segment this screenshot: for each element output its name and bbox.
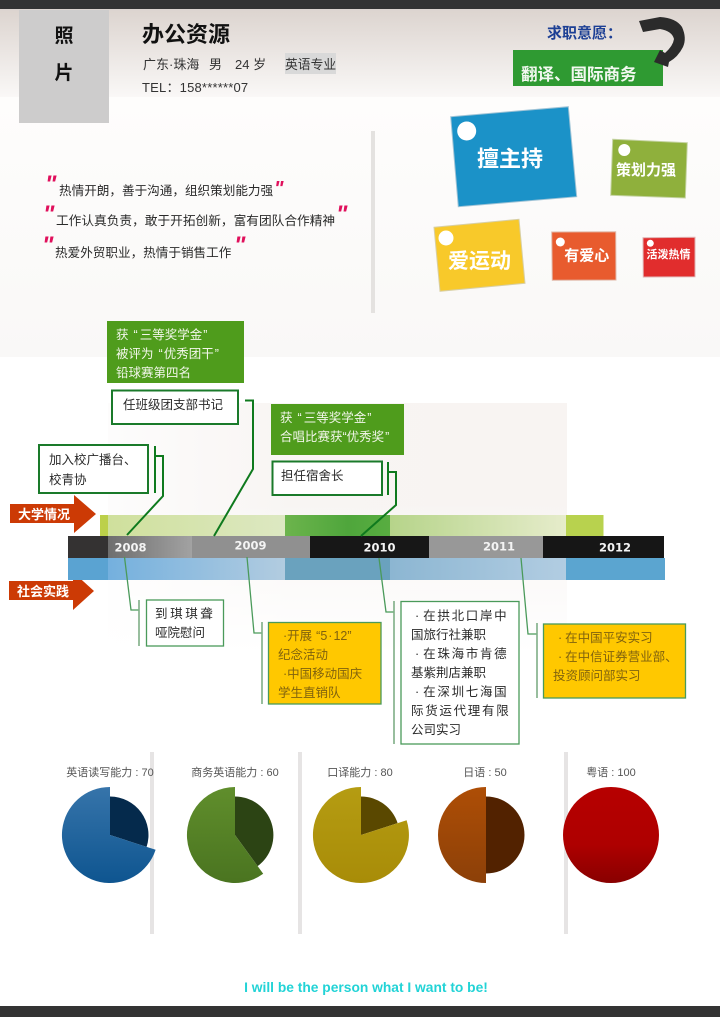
award box 2009: 获 “三等奖学金” bbox=[116, 327, 207, 342]
quote 3: " bbox=[234, 232, 246, 259]
photo placeholder: 片 bbox=[54, 62, 74, 84]
practice box 2008 bbox=[146, 600, 224, 646]
practice box 2010: · 在拱北口岸中 bbox=[415, 608, 508, 623]
pie: Cantonese 100 bbox=[563, 765, 659, 883]
pie: English reading and writing 70 bbox=[62, 765, 156, 883]
job intention bbox=[513, 24, 663, 86]
quote 3 bbox=[42, 232, 246, 260]
quote 3: " bbox=[42, 232, 54, 259]
tag: lively bbox=[643, 237, 695, 277]
practice box 2009 bbox=[268, 622, 381, 704]
year bar: 2011 bbox=[483, 540, 515, 554]
practice box 2010: 际货运代理有限 bbox=[411, 703, 510, 718]
pie: business English 60: 商务英语能力 : 60 bbox=[191, 765, 279, 779]
quote 2: 工作认真负责，敢于开拓创新，富有团队合作精神 bbox=[56, 213, 335, 228]
practice box 2008: 哑院慰问 bbox=[155, 626, 205, 640]
year bar: 2009 bbox=[234, 538, 267, 552]
role box 2008 bbox=[39, 445, 148, 493]
practice box 2010: 国旅行社兼职 bbox=[411, 627, 486, 642]
pie: interpreting 80: 口译能力 : 80 bbox=[327, 765, 393, 779]
personal details bbox=[142, 53, 336, 95]
award box 2009: 被评为 “优秀团干” bbox=[116, 347, 219, 361]
practice box 2010: 基紫荆店兼职 bbox=[411, 666, 486, 680]
connector practice 2011 bbox=[521, 558, 537, 698]
year bar: 2012 bbox=[599, 540, 631, 554]
connector 2010 bbox=[361, 462, 396, 536]
role box 2009 bbox=[112, 390, 238, 424]
quote 2: " bbox=[43, 201, 55, 228]
award box 2009: 铅球赛第四名 bbox=[116, 365, 191, 380]
practice box 2010: · 在珠海市肯德 bbox=[415, 646, 508, 661]
tag: planning: 策划力强 bbox=[616, 161, 676, 179]
tag: sports: 爱运动 bbox=[448, 250, 511, 273]
arrow: university: 大学情况 bbox=[18, 507, 70, 522]
pie: interpreting 80 bbox=[313, 765, 409, 883]
profile divider bbox=[371, 131, 375, 313]
photo placeholder: 照 bbox=[54, 26, 74, 47]
personal details: TEL：158******07 bbox=[142, 80, 248, 95]
practice box 2011: 投资顾问部实习 bbox=[553, 668, 641, 683]
tag: planning bbox=[611, 139, 687, 198]
tag: sports bbox=[434, 219, 525, 291]
tag: caring: 有爱心 bbox=[564, 248, 609, 264]
practice box 2009: ·开展 “5·12” bbox=[283, 629, 352, 643]
practice box 2009: ·中国移动国庆 bbox=[283, 666, 363, 681]
timeline backdrop bbox=[108, 403, 567, 653]
quote 2: " bbox=[336, 201, 348, 228]
personal details: 英语专业 bbox=[285, 57, 336, 72]
role box 2008: 加入校广播台、 bbox=[49, 452, 137, 467]
practice box 2011 bbox=[544, 624, 686, 698]
practice box 2009: 学生直销队 bbox=[278, 685, 341, 700]
name heading: 办公资源 bbox=[142, 22, 230, 47]
quote 3: 热爱外贸职业，热情于销售工作 bbox=[55, 245, 232, 260]
connector practice 2010 bbox=[379, 558, 394, 744]
award box 2009 bbox=[107, 321, 244, 383]
arrow: social practice bbox=[9, 572, 94, 610]
job intention: 翻译、国际商务 bbox=[521, 65, 637, 84]
personal details: 24 岁 bbox=[235, 57, 266, 72]
arrow: university bbox=[10, 495, 96, 533]
personal details: 男 bbox=[209, 57, 222, 72]
role box 2008: 校青协 bbox=[49, 472, 87, 487]
practice box 2010: · 在深圳七海国 bbox=[415, 684, 508, 699]
bottom bar bbox=[0, 1006, 720, 1017]
quote 1: 热情开朗，善于沟通，组织策划能力强 bbox=[59, 183, 274, 198]
profile panel background bbox=[0, 97, 720, 357]
pie: business English 60 bbox=[187, 765, 279, 883]
quote 1 bbox=[45, 171, 284, 200]
practice box 2011: ·在中国平安实习 bbox=[558, 630, 653, 645]
blue band bbox=[68, 558, 665, 580]
arrow: social practice: 社会实践 bbox=[17, 584, 69, 599]
connector practice 2008 bbox=[124, 557, 139, 646]
award box 2010 bbox=[271, 404, 404, 455]
header background bbox=[0, 9, 720, 97]
year bar: 2010 bbox=[363, 540, 396, 554]
award box 2010: 合唱比赛获“优秀奖” bbox=[280, 429, 389, 444]
role box 2009: 任班级团支部书记 bbox=[123, 397, 224, 412]
practice box 2010 bbox=[401, 602, 519, 744]
skill dividers bbox=[150, 752, 568, 934]
quote 2 bbox=[43, 201, 348, 228]
award box 2010: 获 “三等奖学金” bbox=[280, 410, 371, 425]
practice box 2011: ·在中信证券营业部、 bbox=[558, 649, 678, 664]
tag: hosting bbox=[451, 107, 577, 207]
connector 2009 bbox=[214, 400, 253, 536]
icon: curved arrow bbox=[639, 17, 685, 67]
connector practice 2009 bbox=[247, 557, 262, 704]
tag: caring bbox=[552, 232, 616, 280]
tag: lively: 活泼热情 bbox=[646, 247, 690, 261]
personal details: 广东·珠海 bbox=[143, 57, 199, 72]
role box 2010: 担任宿舍长 bbox=[281, 468, 344, 483]
pie: English reading and writing 70: 英语读写能力 : 70 bbox=[66, 765, 154, 779]
quote 1: " bbox=[45, 171, 57, 198]
tag: hosting: 擅主持 bbox=[477, 146, 543, 172]
year bar: 2008 bbox=[114, 540, 147, 554]
motto: I will be the person what I want to be! bbox=[244, 980, 488, 995]
connector 2008 bbox=[127, 446, 163, 535]
job intention: 求职意愿： bbox=[547, 24, 622, 42]
pie: Japanese 50: 日语 : 50 bbox=[463, 766, 507, 779]
green band bbox=[100, 515, 604, 536]
practice box 2010: 公司实习 bbox=[411, 722, 461, 737]
pie: Cantonese 100: 粤语 : 100 bbox=[586, 765, 636, 779]
year bar bbox=[68, 536, 664, 558]
pie: Japanese 50 bbox=[438, 766, 524, 883]
photo placeholder bbox=[19, 10, 109, 123]
practice box 2009: 纪念活动 bbox=[278, 647, 328, 662]
practice box 2008: 到琪琪聋 bbox=[155, 606, 215, 621]
role box 2010 bbox=[272, 462, 382, 495]
top bar bbox=[0, 0, 720, 9]
quote 1: " bbox=[274, 178, 284, 200]
